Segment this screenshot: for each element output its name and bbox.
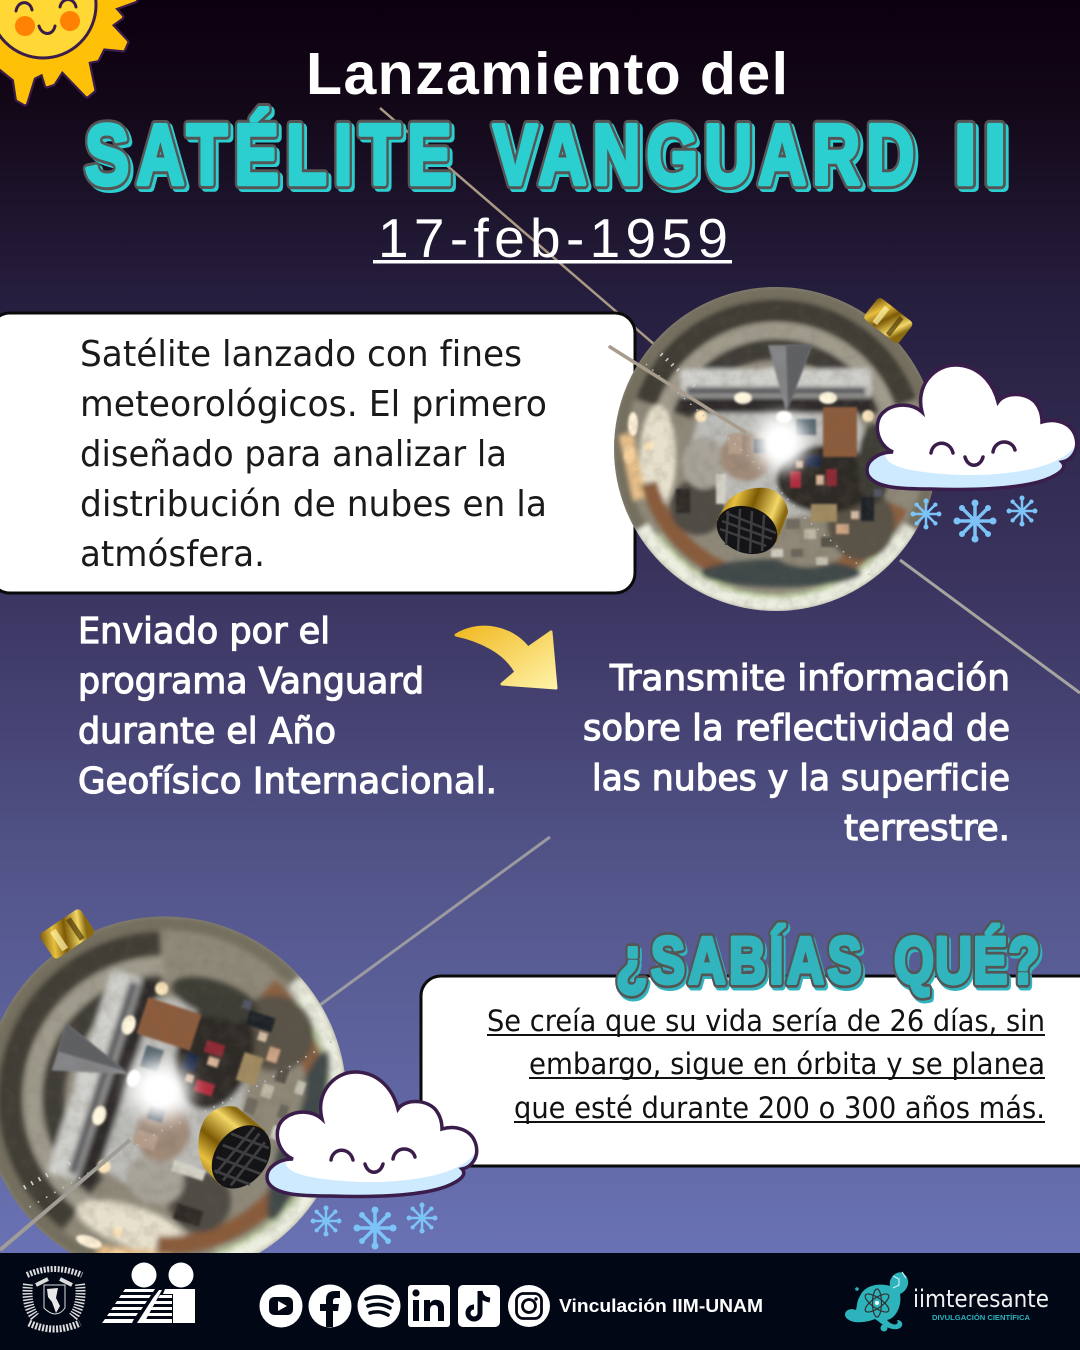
footer bar [0,1253,1080,1350]
antenna: bottom satellite long rod [320,837,550,1005]
text: divulgación científica: DIVULGACIÓN CIENTÍFICA [932,1313,1031,1322]
heading: ¿Sabías qué? [616,923,1042,1000]
heading fill: ¿SABÍAS [616,923,862,997]
bottom satellite sphere [0,865,398,1331]
title line: Lanzamiento del: Lanzamiento del [306,41,788,107]
text: transmitted information: sobre la reflectividad de [583,708,1010,749]
heading outline [616,923,1040,997]
antenna: top satellite lower rod [900,560,1080,693]
text: transmitted information: Transmite información [609,658,1010,699]
title outline: II [954,107,1006,202]
icon: yellow curved arrow [456,627,556,688]
icon: Instagram [508,1285,550,1327]
text: transmitted information: terrestre. [844,808,1010,849]
text: transmitted information [583,658,1010,849]
text: Vanguard programme [78,611,497,802]
panel: white fact box [421,976,1080,1166]
heading outline: ¿SABÍAS [616,923,862,997]
text: fun fact underlined [487,1004,1045,1125]
text: intro paragraph [80,334,547,575]
title: Satélite Vanguard II [85,107,1009,206]
text: Vanguard programme: Geofísico Internacional. [78,761,497,802]
icon: smiling sun [0,0,135,103]
text: Vanguard programme: durante el Año [78,711,336,752]
title shadow: VANGUARD [496,111,917,206]
title fill: II [954,107,1006,202]
text: intro paragraph: Satélite lanzado con fines [80,334,522,375]
text: iimteresante brand: iimteresante [913,1285,1049,1313]
title shadow: SATÉLITE [88,111,455,206]
text: intro paragraph: atmósfera. [80,534,265,575]
title outline [85,107,1006,203]
heading shadow: QUÉ? [896,926,1042,1000]
text: fun fact underlined: que esté durante 200 o 300 años más. [514,1091,1045,1125]
title fill [85,107,1006,203]
text: intro paragraph: distribución de nubes en la [80,484,547,525]
heading outline: QUÉ? [894,923,1040,997]
logo: UNAM crest [27,1269,82,1329]
text: Vinculación IIM-UNAM: Vinculación IIM-UNAM [559,1296,763,1316]
text: transmitted information: las nubes y la superficie [592,758,1010,799]
panel: white intro box [0,313,635,593]
antenna: bottom satellite front rod [0,1140,130,1250]
top satellite sphere [611,284,941,614]
title outline: SATÉLITE [85,108,452,203]
heading shadow [618,926,1042,1000]
antenna: top satellite front rod [610,347,745,432]
icon: cloud with snowflakes (top) [867,365,1077,542]
text: intro paragraph: meteorológicos. El primero [80,384,547,425]
title outline: VANGUARD [493,108,914,203]
title shadow [88,110,1009,206]
text: fun fact underlined: embargo, sigue en órbita y se planea [529,1047,1045,1081]
text: Vanguard programme: programa Vanguard [78,661,424,702]
icon: Spotify [358,1284,400,1328]
date: 17-feb-1959 [378,207,728,269]
logo: IIM [102,1262,195,1323]
heading fill [616,923,1040,997]
logo: iimteresante blob [845,1272,908,1332]
title fill: VANGUARD [493,108,914,203]
antenna: long upper antenna of top satellite [380,108,655,345]
heading shadow: ¿SABÍAS [618,926,864,1000]
text: Vanguard programme: Enviado por el [78,611,330,652]
icon: YouTube [260,1284,302,1328]
title fill: SATÉLITE [85,108,452,203]
title shadow: II [957,110,1009,205]
text: intro paragraph: diseñado para analizar la [80,434,507,475]
icon: cloud with snowflakes (bottom) [267,1072,477,1250]
icon: Facebook [308,1284,352,1328]
icon: TikTok [458,1285,500,1327]
heading fill: QUÉ? [894,923,1040,997]
text: fun fact underlined: Se creía que su vida sería de 26 días, sin [487,1004,1045,1038]
icon: LinkedIn [408,1285,450,1327]
